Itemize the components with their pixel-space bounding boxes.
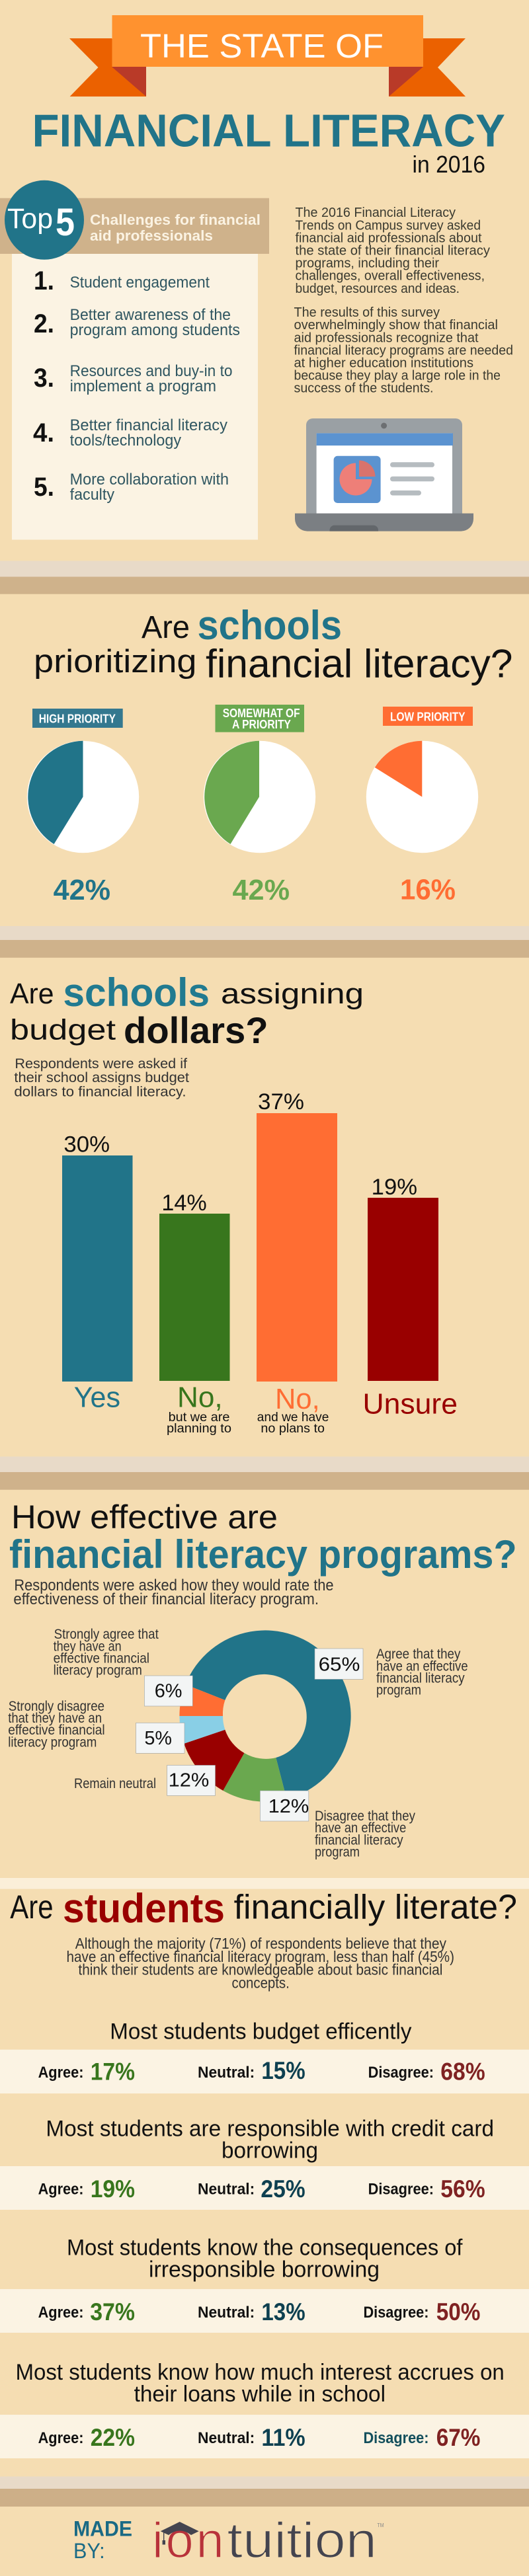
challenge 3 [34, 362, 233, 395]
callout: 6% strongly agree: 6% [155, 1681, 183, 1702]
statement: credit card borrowing: Agree: [38, 2181, 83, 2199]
bar: no, no plans to: No, [275, 1383, 320, 1415]
statement: credit card borrowing: 56% [440, 2175, 485, 2203]
statement: irresponsible borrowing: 50% [436, 2298, 480, 2325]
chart: low priority pie: 16% [400, 874, 456, 906]
intro text block: because they play a large role in the [294, 369, 501, 383]
heading: are students financially literate: Are [10, 1889, 54, 1926]
statement: irresponsible borrowing: Most students know the consequences of [67, 2235, 463, 2260]
heading: are schools prioritizing: schools [197, 603, 342, 648]
text: effectiveness intro: Respondents were asked how they would rate the [14, 1577, 334, 1594]
callout: 5% strongly disagree: effective financial [8, 1723, 105, 1738]
chart: effectiveness donut [179, 1630, 351, 1802]
statement: budget efficiently: Disagree: [368, 2064, 434, 2082]
chart: low priority pie: LOW PRIORITY [390, 710, 466, 723]
bar: yes: 30% [63, 1132, 110, 1157]
challenge 5: 5. [34, 473, 54, 502]
statement: interest on loans: Most students know how much interest accrues on [16, 2360, 505, 2385]
callout: 6% strongly agree: effective financial [54, 1651, 149, 1666]
bar: no, no plans to: and we have [257, 1411, 329, 1425]
heading: are students financially literate: financially literate? [234, 1889, 517, 1927]
statement: interest on loans: Disagree: [364, 2429, 428, 2447]
statement: interest on loans [0, 2360, 529, 2458]
statement: interest on loans: 67% [436, 2424, 480, 2451]
statement: budget efficiently: Most students budget efficently [110, 2019, 411, 2044]
challenge 1: 1. [34, 266, 54, 295]
bar: no, planning to: No, [177, 1382, 223, 1414]
chart: somewhat of a priority pie: A PRIORITY [232, 718, 291, 731]
icon: laptop with pie chart [295, 418, 473, 531]
heading: are schools prioritizing: Are [142, 610, 190, 645]
intro text block: The results of this survey [294, 305, 440, 320]
chart: somewhat of a priority pie: 42% [233, 874, 290, 906]
intro text block: success of the students. [294, 381, 434, 396]
heading: are schools prioritizing [34, 603, 513, 686]
heading: are schools prioritizing: financial literacy? [206, 642, 513, 686]
intro text block: The 2016 Financial Literacy [295, 206, 456, 220]
subheading year: in 2016 [413, 151, 485, 178]
statement: budget efficiently [0, 2019, 529, 2093]
challenge 3: 3. [34, 364, 54, 393]
challenge 2: 2. [34, 309, 54, 338]
bar: unsure: Unsure [362, 1388, 458, 1421]
callout: 65% agree: 65% [319, 1654, 360, 1675]
intro text block: overwhelmingly show that financial [294, 318, 498, 332]
statement: interest on loans: Neutral: [198, 2429, 255, 2447]
challenge 3: Resources and buy-in to [70, 362, 232, 380]
callout: 65% agree [315, 1647, 468, 1698]
text: budget question intro: dollars to financial literacy. [14, 1084, 186, 1100]
text: budget question intro: their school assigns budget [14, 1070, 189, 1085]
statement: credit card borrowing: Disagree: [368, 2181, 434, 2199]
panel: top 5 challenges: Challenges for financial [90, 212, 261, 228]
callout: 65% agree: financial literacy [376, 1671, 465, 1686]
title banner: THE STATE OF [140, 27, 384, 65]
statement: interest on loans: Agree: [38, 2429, 83, 2447]
text: students intro: have an effective financial literacy program, less than half (45%) [66, 1948, 454, 1965]
text: budget question intro: Respondents were asked if [15, 1056, 187, 1072]
bar: unsure [362, 1175, 458, 1421]
statement: irresponsible borrowing: 13% [261, 2298, 305, 2325]
chart: high priority pie: 42% [54, 874, 110, 906]
statement: budget efficiently: 68% [440, 2058, 485, 2085]
intro text block: programs, including their [295, 256, 439, 271]
callout: 12% disagree: program [315, 1844, 360, 1860]
callout: 12% remain neutral: Remain neutral [74, 1776, 156, 1791]
statement: irresponsible borrowing: Disagree: [364, 2304, 428, 2322]
callout: 12% disagree: have an effective [315, 1820, 406, 1836]
callout: 5% strongly disagree: that they have an [8, 1711, 102, 1726]
callout: 65% agree: Agree that they [376, 1647, 461, 1662]
panel: top 5 challenges: aid professionals [90, 227, 213, 244]
callout: 12% disagree: financial literacy [315, 1832, 403, 1848]
bar: yes: Yes [74, 1382, 120, 1414]
chart: low priority pie [366, 707, 478, 906]
statement: interest on loans: 11% [261, 2424, 305, 2451]
logo: iontuition: ion [152, 2513, 224, 2569]
panel: top 5 challenges: Top [7, 203, 53, 235]
heading: how effective are programs: How effective are [11, 1499, 278, 1536]
heading: are schools assigning budget dollars [10, 970, 364, 1051]
statement: irresponsible borrowing: Agree: [38, 2304, 83, 2322]
heading: are schools assigning budget dollars: assigning [221, 978, 364, 1010]
statement: budget efficiently: 15% [261, 2057, 305, 2084]
challenge 2: Better awareness of the [70, 306, 231, 324]
statement: budget efficiently: Agree: [38, 2064, 83, 2082]
statement: credit card borrowing: borrowing [222, 2138, 318, 2164]
text: students intro: think their students are knowledgeable about basic financial [78, 1961, 442, 1978]
statement: irresponsible borrowing: irresponsible borrowing [149, 2257, 380, 2283]
callout: 12% remain neutral [74, 1765, 216, 1795]
heading: are schools prioritizing: prioritizing [34, 644, 197, 680]
bar: unsure: 19% [372, 1175, 417, 1200]
callout: 12% disagree: Disagree that they [315, 1809, 415, 1824]
logo: iontuition: TM [377, 2522, 384, 2528]
statement: irresponsible borrowing: 37% [90, 2298, 135, 2325]
callout: 5% strongly disagree [8, 1699, 184, 1753]
heading: how effective are programs [9, 1499, 517, 1577]
footer: made by: MADE [73, 2517, 132, 2541]
chart: somewhat of a priority pie [204, 705, 315, 906]
intro text block: at higher education institutions [294, 356, 473, 370]
text: students intro: Although the majority (71%) of respondents believe that they [75, 1935, 446, 1952]
challenge 2: program among students [70, 321, 240, 339]
challenge 1: Student engagement [70, 274, 210, 292]
bar: no, no plans to: 37% [258, 1089, 304, 1114]
intro text block: the state of their financial literacy [295, 243, 490, 258]
challenge 4: Better financial literacy [70, 416, 227, 434]
heading: are schools assigning budget dollars: Are [10, 978, 54, 1010]
bar: yes [62, 1132, 132, 1414]
bar: no, planning to: but we are [169, 1411, 230, 1425]
statement: credit card borrowing [0, 2117, 529, 2210]
heading: are students financially literate: students [63, 1886, 225, 1932]
bar: no, planning to: 14% [161, 1190, 207, 1216]
text: students intro: concepts. [231, 1974, 290, 1991]
intro text block: budget, resources and ideas. [295, 282, 460, 296]
panel: top 5 challenges: 5 [56, 201, 75, 244]
footer: made by [73, 2517, 132, 2563]
challenge 1 [34, 266, 210, 295]
chart: high priority pie: HIGH PRIORITY [39, 712, 116, 725]
callout: 6% strongly agree: Strongly agree that [54, 1627, 159, 1642]
logo: iontuition [152, 2513, 384, 2569]
challenge 5: More collaboration with [70, 471, 229, 488]
heading: are schools assigning budget dollars: dollars? [124, 1009, 268, 1051]
chart: somewhat of a priority pie: SOMEWHAT OF [223, 707, 300, 720]
text: students intro [66, 1935, 454, 1991]
main heading: FINANCIAL LITERACY [32, 105, 505, 157]
text: budget question intro [14, 1056, 189, 1100]
intro text block: Trends on Campus survey asked [295, 218, 481, 233]
statement: irresponsible borrowing [0, 2235, 529, 2333]
callout: 6% strongly agree: they have an [54, 1639, 122, 1654]
chart: high priority pie [27, 709, 139, 906]
challenge 4 [33, 416, 227, 449]
statement: interest on loans: 22% [91, 2424, 135, 2451]
panel: top 5 challenges [0, 180, 269, 539]
footer: made by: BY: [73, 2539, 105, 2563]
intro text block: challenges, overall effectiveness, [295, 269, 485, 284]
bar: no, no plans to: no plans to [261, 1422, 325, 1436]
intro text block: financial aid professionals about [295, 231, 482, 245]
challenge 5: faculty [70, 486, 114, 504]
challenge 2 [34, 306, 240, 339]
challenge 4: 4. [33, 418, 54, 448]
bar: no, planning to: planning to [167, 1422, 231, 1436]
heading: are schools assigning budget dollars: schools [63, 970, 210, 1015]
statement: budget efficiently: 17% [91, 2058, 135, 2085]
statement: credit card borrowing: Most students are responsible with credit card [46, 2117, 494, 2142]
callout: 6% strongly agree: literacy program [54, 1663, 142, 1678]
callout: 12% disagree [260, 1791, 415, 1860]
title banner [69, 15, 466, 97]
callout: 65% agree: program [376, 1683, 421, 1698]
statement: interest on loans: their loans while in school [134, 2382, 386, 2407]
intro text block: aid professionals recognize that [294, 331, 479, 345]
intro text block [294, 206, 513, 396]
heading: how effective are programs: financial literacy programs? [9, 1532, 517, 1577]
callout: 5% strongly disagree: literacy program [8, 1735, 97, 1750]
intro text block: financial literacy programs are needed [294, 344, 513, 358]
callout: 12% remain neutral: 12% [169, 1770, 209, 1791]
heading: are schools assigning budget dollars: budget [10, 1014, 116, 1046]
heading: are students financially literate [10, 1886, 517, 1932]
bar: no, planning to [159, 1190, 231, 1436]
challenge 3: implement a program [70, 377, 216, 395]
bar: no, no plans to [257, 1089, 337, 1436]
text: effectiveness intro [13, 1577, 334, 1608]
callout: 5% strongly disagree: 5% [144, 1728, 172, 1749]
callout: 12% disagree: 12% [268, 1796, 309, 1817]
text: effectiveness intro: effectiveness of their financial literacy program. [13, 1590, 319, 1608]
logo: iontuition: tuition [227, 2513, 377, 2569]
statement: irresponsible borrowing: Neutral: [198, 2304, 255, 2322]
challenge 4: tools/technology [70, 432, 181, 449]
callout: 5% strongly disagree: Strongly disagree [9, 1699, 104, 1714]
callout: 65% agree: have an effective [376, 1659, 468, 1674]
statement: budget efficiently: Neutral: [198, 2064, 255, 2082]
statement: credit card borrowing: Neutral: [198, 2181, 255, 2199]
statement: credit card borrowing: 25% [261, 2175, 305, 2203]
callout: 6% strongly agree [54, 1627, 192, 1706]
statement: credit card borrowing: 19% [91, 2175, 135, 2203]
challenge 5 [34, 471, 229, 504]
bar chart: budget dollars [62, 1089, 458, 1436]
